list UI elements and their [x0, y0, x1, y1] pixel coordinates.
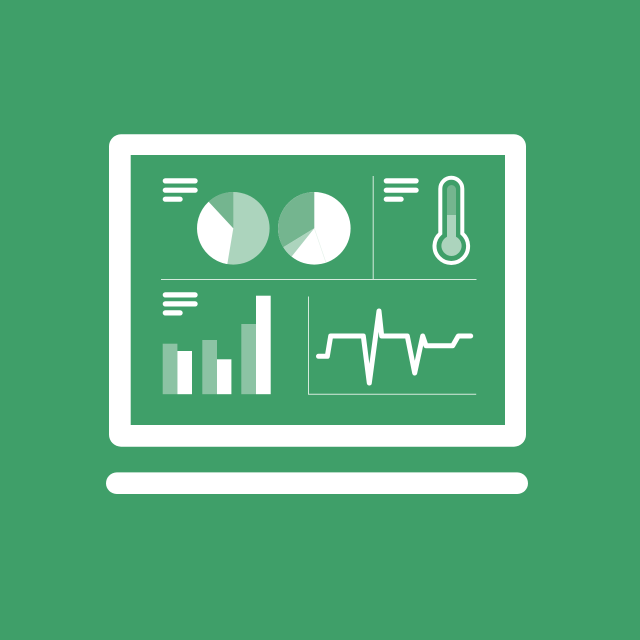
panel: monitor frame [109, 134, 526, 447]
text lines: bar chart legend [163, 292, 198, 316]
bars [163, 296, 271, 394]
panel: line chart [308, 296, 476, 394]
panel: pie charts [163, 178, 351, 265]
pie chart 1 [197, 192, 270, 265]
pulse line [318, 311, 471, 383]
text lines: thermometer legend [384, 178, 419, 202]
panel: thermometer [384, 178, 468, 263]
chart axes [308, 296, 476, 394]
icon: thermometer [434, 178, 468, 263]
pie chart 2 [278, 192, 351, 265]
text lines: pie charts legend [163, 178, 198, 202]
base bar [106, 472, 528, 494]
panel: bar chart [163, 292, 271, 394]
